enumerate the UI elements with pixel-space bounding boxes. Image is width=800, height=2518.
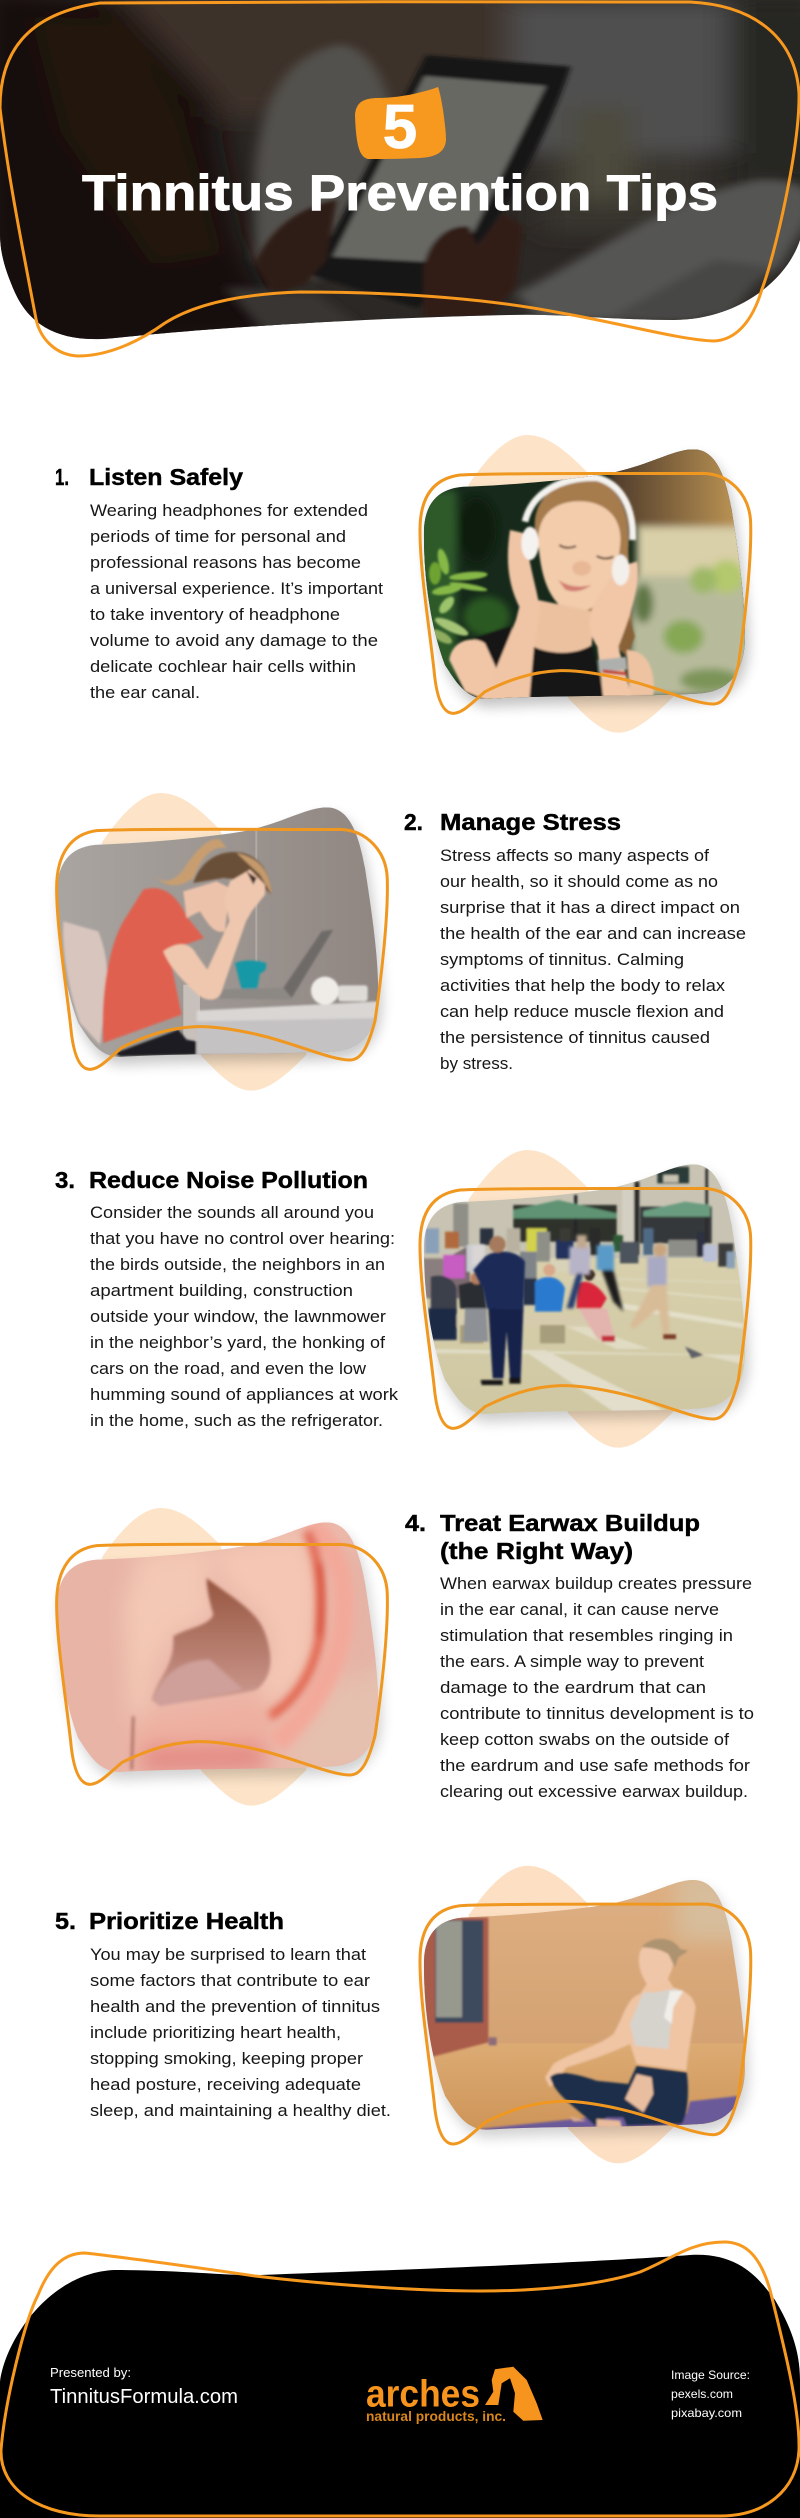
heading: tip 2: 2. [404, 809, 423, 835]
heading: tip 5: 5. [55, 1908, 76, 1934]
text block: tip 1: Wearing headphones for extended [90, 502, 368, 520]
text block: tip 4: the ears. A simple way to prevent [440, 1653, 704, 1671]
header photo: reading on a tablet, dark overlay [0, 0, 800, 367]
badge with number 5 [355, 87, 446, 162]
presented by: TinnitusFormula.com [50, 2386, 238, 2408]
text block: tip 3 [90, 1204, 399, 1430]
text block: tip 3: humming sound of appliances at work [90, 1386, 399, 1404]
text block: tip 5: some factors that contribute to ear [90, 1972, 371, 1990]
text block: tip 5: stopping smoking, keeping proper [90, 2050, 364, 2068]
heading: tip 4 [405, 1510, 700, 1564]
photo blob: close-up of an ear [43, 1503, 393, 1813]
text block: tip 1: periods of time for personal and [90, 528, 346, 546]
photo blob: stressed woman at laptop [43, 788, 393, 1098]
text block: tip 3: outside your window, the lawnmower [90, 1308, 387, 1326]
heading: tip 1: Listen Safely [89, 464, 243, 490]
heading: tip 5: Prioritize Health [89, 1908, 284, 1934]
text block: tip 2: activities that help the body to relax [440, 977, 726, 995]
text block: tip 3: cars on the road, and even the low [90, 1360, 366, 1378]
panel: tip 3 reduce noise pollution [55, 1145, 760, 1448]
text block: tip 4: stimulation that resembles ringing in [440, 1627, 733, 1645]
text block: tip 5: head posture, receiving adequate [90, 2076, 361, 2094]
text block: tip 3: in the neighbor’s yard, the honking of [90, 1334, 385, 1352]
text block: tip 1: the ear canal. [90, 684, 200, 702]
text block: tip 5: include prioritizing heart health, [90, 2024, 341, 2042]
text block: tip 1: delicate cochlear hair cells within [90, 658, 356, 676]
photo blob: woman meditating [410, 1861, 760, 2163]
panel: tip 2 manage stress [43, 788, 746, 1098]
heading: tip 3: Reduce Noise Pollution [89, 1167, 368, 1193]
header orange outline [0, 2, 799, 356]
text block: tip 3: Consider the sounds all around you [90, 1204, 374, 1222]
text block: tip 4: the eardrum and use safe methods for [440, 1757, 751, 1775]
image source [671, 2368, 750, 2420]
text block: tip 2: can help reduce muscle flexion and [440, 1003, 724, 1021]
footer orange outline [1, 2242, 799, 2516]
panel: tip 1 listen safely [55, 430, 760, 740]
heading: tip 1: 1. [55, 464, 69, 490]
text block: tip 2: surprise that it has a direct impact on [440, 899, 740, 917]
panel: tip 5 prioritize health [55, 1861, 760, 2163]
text block: tip 5: sleep, and maintaining a healthy diet. [90, 2102, 391, 2120]
logo: arches natural products: natural products, inc. [366, 2408, 506, 2424]
title: Tinnitus Prevention Tips [82, 165, 718, 221]
text block: tip 4: keep cotton swabs on the outside of [440, 1731, 729, 1749]
text block: tip 1: volume to avoid any damage to the [90, 632, 378, 650]
text block: tip 2: symptoms of tinnitus. Calming [440, 951, 684, 969]
text block: tip 2 [440, 847, 746, 1073]
image source: pixabay.com [671, 2406, 742, 2420]
text block: tip 3: the birds outside, the neighbors in an [90, 1256, 385, 1274]
badge with number 5: 5 [383, 93, 417, 162]
presented by: Presented by: [50, 2365, 131, 2380]
icon: delicate arch [485, 2367, 543, 2421]
logo: arches natural products: arches [366, 2374, 480, 2416]
text block: tip 1 [90, 502, 383, 702]
heading: tip 4: 4. [405, 1510, 426, 1536]
text block: tip 2: the health of the ear and can increase [440, 925, 746, 943]
footer black shape [0, 2255, 800, 2518]
text block: tip 4: clearing out excessive earwax buildup. [440, 1783, 748, 1801]
text block: tip 5: You may be surprised to learn that [90, 1946, 366, 1964]
heading: tip 4: Treat Earwax Buildup [440, 1510, 700, 1536]
photo blob: busy city plaza [410, 1145, 760, 1448]
text block: tip 4: contribute to tinnitus development is to [440, 1705, 754, 1723]
image source: Image Source: [671, 2368, 750, 2382]
text block: tip 2: by stress. [440, 1055, 513, 1073]
text block: tip 3: in the home, such as the refrigerator. [90, 1412, 383, 1430]
text block: tip 4: damage to the eardrum that can [440, 1679, 706, 1697]
panel: tip 4 treat earwax buildup [43, 1503, 754, 1813]
photo blob: woman with headphones [407, 430, 760, 740]
text block: tip 3: apartment building, construction [90, 1282, 353, 1300]
text block: tip 3: that you have no control over hearing: [90, 1230, 395, 1248]
heading: tip 3: 3. [55, 1167, 75, 1193]
header banner [0, 0, 800, 367]
logo: arches natural products [366, 2367, 543, 2424]
text block: tip 2: our health, so it should come as no [440, 873, 718, 891]
text block: tip 1: professional reasons has become [90, 554, 361, 572]
presented by [50, 2365, 238, 2408]
text block: tip 2: the persistence of tinnitus caused [440, 1029, 710, 1047]
text block: tip 1: to take inventory of headphone [90, 606, 340, 624]
text block: tip 4: in the ear canal, it can cause nerve [440, 1601, 719, 1619]
text block: tip 1: a universal experience. It’s important [90, 580, 383, 598]
heading: tip 2: Manage Stress [440, 809, 621, 835]
text block: tip 5: health and the prevention of tinnitus [90, 1998, 380, 2016]
text block: tip 2: Stress affects so many aspects of [440, 847, 709, 865]
footer [0, 2242, 800, 2518]
text block: tip 5 [90, 1946, 391, 2120]
text block: tip 4 [440, 1575, 754, 1801]
image source: pexels.com [671, 2387, 733, 2401]
heading: tip 4: (the Right Way) [440, 1538, 633, 1564]
text block: tip 4: When earwax buildup creates pressure [440, 1575, 752, 1593]
